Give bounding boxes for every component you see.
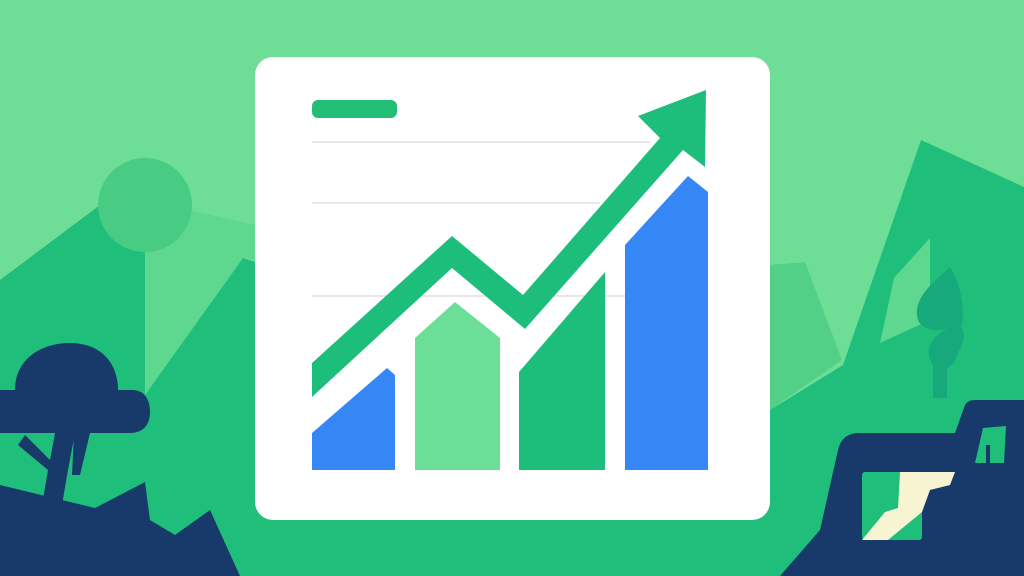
title bar <box>312 100 397 118</box>
right mountains <box>770 140 1024 576</box>
trend arrow <box>312 90 706 397</box>
left tree <box>0 343 240 576</box>
middle ground <box>240 420 800 576</box>
small window <box>975 426 1006 463</box>
mountain window <box>880 238 930 343</box>
building window <box>862 472 922 540</box>
left mountains <box>0 158 255 576</box>
sun <box>98 158 192 252</box>
grid lines <box>312 142 650 296</box>
card <box>255 57 770 520</box>
right building <box>780 400 1024 576</box>
ground left <box>0 482 240 576</box>
bar chart <box>312 176 708 470</box>
leaf tree <box>917 267 964 398</box>
